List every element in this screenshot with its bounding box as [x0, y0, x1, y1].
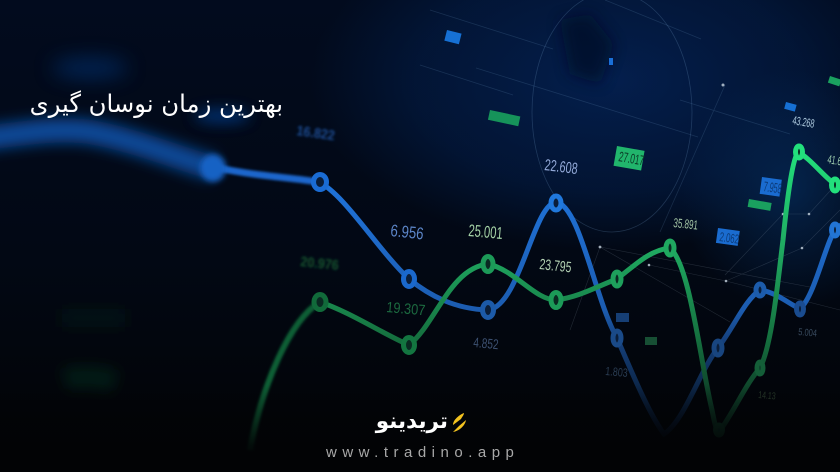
- blurred labels: 16.822: [296, 123, 336, 143]
- value labels: 1.803: [605, 365, 628, 380]
- value labels: 22.608: [544, 156, 579, 178]
- blue tags: 2.062: [718, 230, 740, 247]
- blurred node: left: [200, 154, 226, 182]
- green tags: 27.017: [617, 150, 645, 169]
- value labels: 35.891: [673, 216, 699, 233]
- value labels: 23.795: [539, 255, 572, 276]
- green data line: [62, 146, 840, 450]
- blue data line: [0, 130, 840, 434]
- logo wordmark: تریدینو: [375, 409, 448, 434]
- value labels: 14.13: [758, 389, 776, 402]
- website url: www.tradino.app: [325, 444, 519, 461]
- blurred labels: [296, 123, 340, 273]
- radar circle and grid lines: [420, 0, 790, 232]
- bottom fade: [0, 385, 840, 472]
- network nodes: [570, 84, 840, 330]
- value labels: 4.852: [473, 334, 499, 353]
- blurred labels: 20.976: [300, 253, 340, 273]
- green tags: [488, 76, 840, 345]
- icon: lightning bolt: [453, 413, 466, 432]
- blue tags: 7.958: [762, 180, 783, 197]
- blue node markers: [314, 174, 838, 355]
- value labels: 19.307: [386, 298, 426, 319]
- logo: tradino: [375, 409, 466, 434]
- value labels: 6.956: [390, 222, 424, 244]
- green node markers: [314, 146, 838, 435]
- value labels: [386, 114, 840, 402]
- value labels: 25.001: [468, 222, 503, 244]
- title: بهترین زمان نوسان گیری: [30, 89, 283, 118]
- blue tags: [444, 30, 797, 322]
- value labels: 43.268: [791, 114, 816, 131]
- value labels: 5.004: [798, 326, 818, 339]
